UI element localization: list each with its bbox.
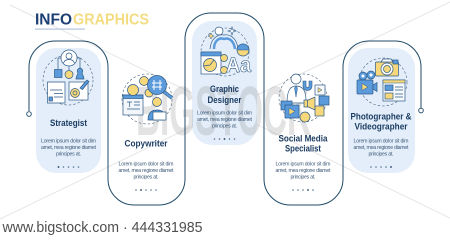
text: photographer description: amet, mea regione diamet [354,145,409,151]
text: strategist description [41,138,97,158]
heading: copywriter: Copywriter [124,138,168,150]
text: strategist description: amet, mea regione diamet [41,145,97,151]
dots: social media [292,189,314,191]
dots: copywriter [135,189,157,191]
heading: graphic designer [208,84,242,106]
text: social media description: Lorem ipsum dolor sit dim [276,162,330,168]
text: photographer description: Lorem ipsum dolor sit dim [354,138,408,144]
title [35,12,149,30]
text: strategist description: Lorem ipsum dolor sit dim [41,138,96,144]
text: copywriter description: Lorem ipsum dolor sit dim [118,162,174,168]
text: social media description: amet, mea regione diamet [276,168,331,174]
dots: photographer [370,166,392,168]
heading: social media specialist [278,134,328,154]
snake outline connecting panels [27,13,423,205]
icon: graphic designer: Aa [226,54,251,77]
heading: photographer and videographer: Photographer & [350,112,412,122]
heading: strategist: Strategist [50,118,88,129]
panel background: strategist [36,48,101,173]
panel background: photographer and videographer [348,48,415,173]
text: photographer description: principes at. [368,152,394,158]
text: copywriter description: amet, mea regione diamet [118,168,174,174]
heading: social media specialist: Social Media [278,134,328,144]
heading: graphic designer: Designer [208,95,242,106]
heading: graphic designer: Graphic [210,84,239,95]
heading: photographer and videographer: Videographer [354,122,408,132]
watermark url: www.bigstock.com · 444331985 [2,220,203,236]
text: graphic designer description: principes at. [212,124,237,130]
heading: photographer and videographer [350,112,412,132]
dots: strategist [58,166,79,168]
panel background: graphic designer [192,21,257,145]
text: copywriter description: principes at. [134,174,158,180]
text: social media description: principes at. [290,174,316,180]
text: copywriter description [118,162,174,180]
icon: graphic designer [201,27,251,77]
text: strategist description: principes at. [56,152,81,158]
icon: copywriter [122,74,172,124]
text: graphic designer description: amet, mea regione diamet [197,117,253,123]
icon: strategist [43,50,93,105]
text: photographer description [354,138,409,158]
dots: graphic designer [214,138,235,140]
text: graphic designer description: Lorem ipsum dolor sit dim [197,110,252,116]
title: GRAPHICS [73,12,149,28]
title: INFO [35,12,72,28]
heading: social media specialist: Specialist [285,144,322,154]
text: graphic designer description [197,110,253,130]
icon: social media specialist [279,74,329,122]
text: social media description [276,162,331,180]
icon: photographer and videographer [357,58,407,106]
